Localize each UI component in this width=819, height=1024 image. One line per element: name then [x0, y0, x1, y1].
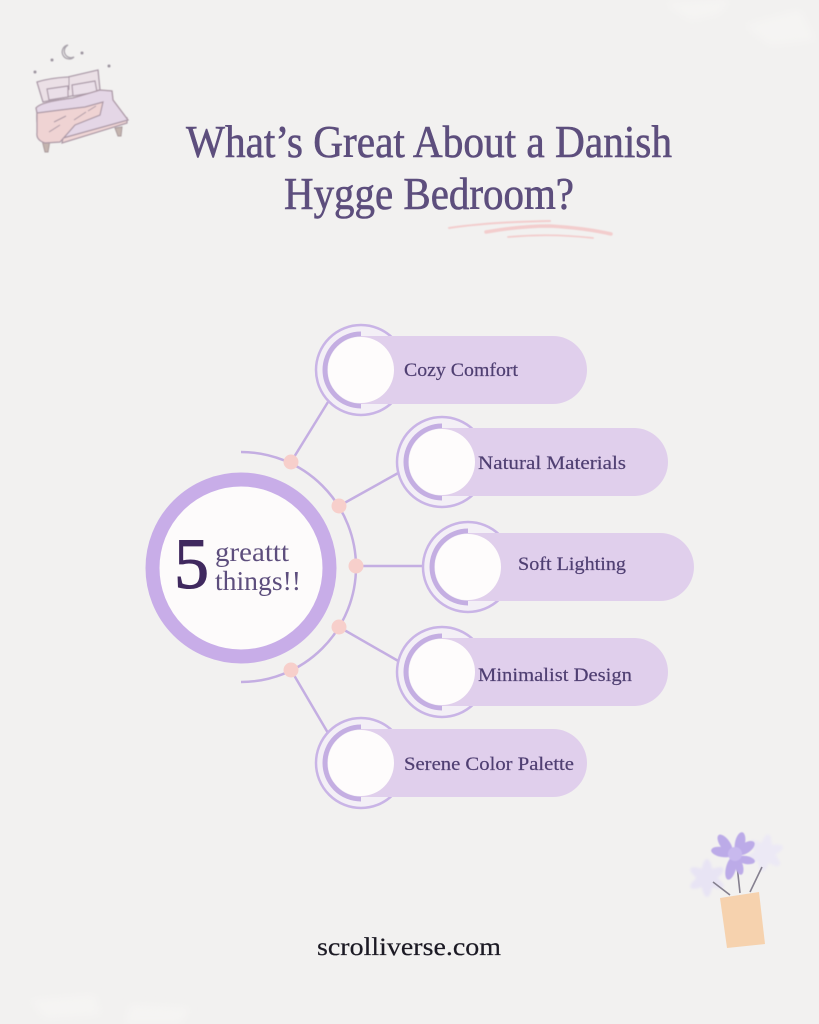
title underline brush stroke — [449, 221, 611, 238]
item: Cozy Comfort: Cozy Comfort — [404, 361, 519, 381]
central circle: 5 greattt things — [152, 480, 330, 656]
title: Hygge Bedroom? — [284, 168, 574, 219]
connector dots — [284, 454, 364, 678]
icon: flowers in vase — [688, 831, 785, 948]
connector lines — [291, 402, 426, 733]
item: Cozy Comfort — [316, 325, 587, 415]
item: Natural Materials — [397, 417, 668, 507]
item: Minimalist Design — [397, 627, 668, 717]
central circle: 5 greattt things: things!! — [215, 566, 301, 596]
title — [186, 116, 672, 219]
title: What’s Great About a Danish — [186, 116, 672, 167]
icon: bed with moon and stars — [34, 45, 128, 152]
item: Serene Color Palette — [316, 718, 587, 808]
item: Soft Lighting: Soft Lighting — [518, 555, 626, 575]
central circle: 5 greattt things: greattt — [215, 537, 290, 567]
item: Serene Color Palette: Serene Color Palette — [404, 755, 574, 775]
item: Natural Materials: Natural Materials — [478, 454, 626, 474]
item: Soft Lighting — [423, 522, 694, 612]
connector arc — [241, 452, 356, 682]
item: Minimalist Design: Minimalist Design — [478, 666, 632, 686]
central circle: 5 greattt things: 5 — [174, 524, 209, 604]
website footer: scrolliverse.com — [317, 934, 502, 961]
